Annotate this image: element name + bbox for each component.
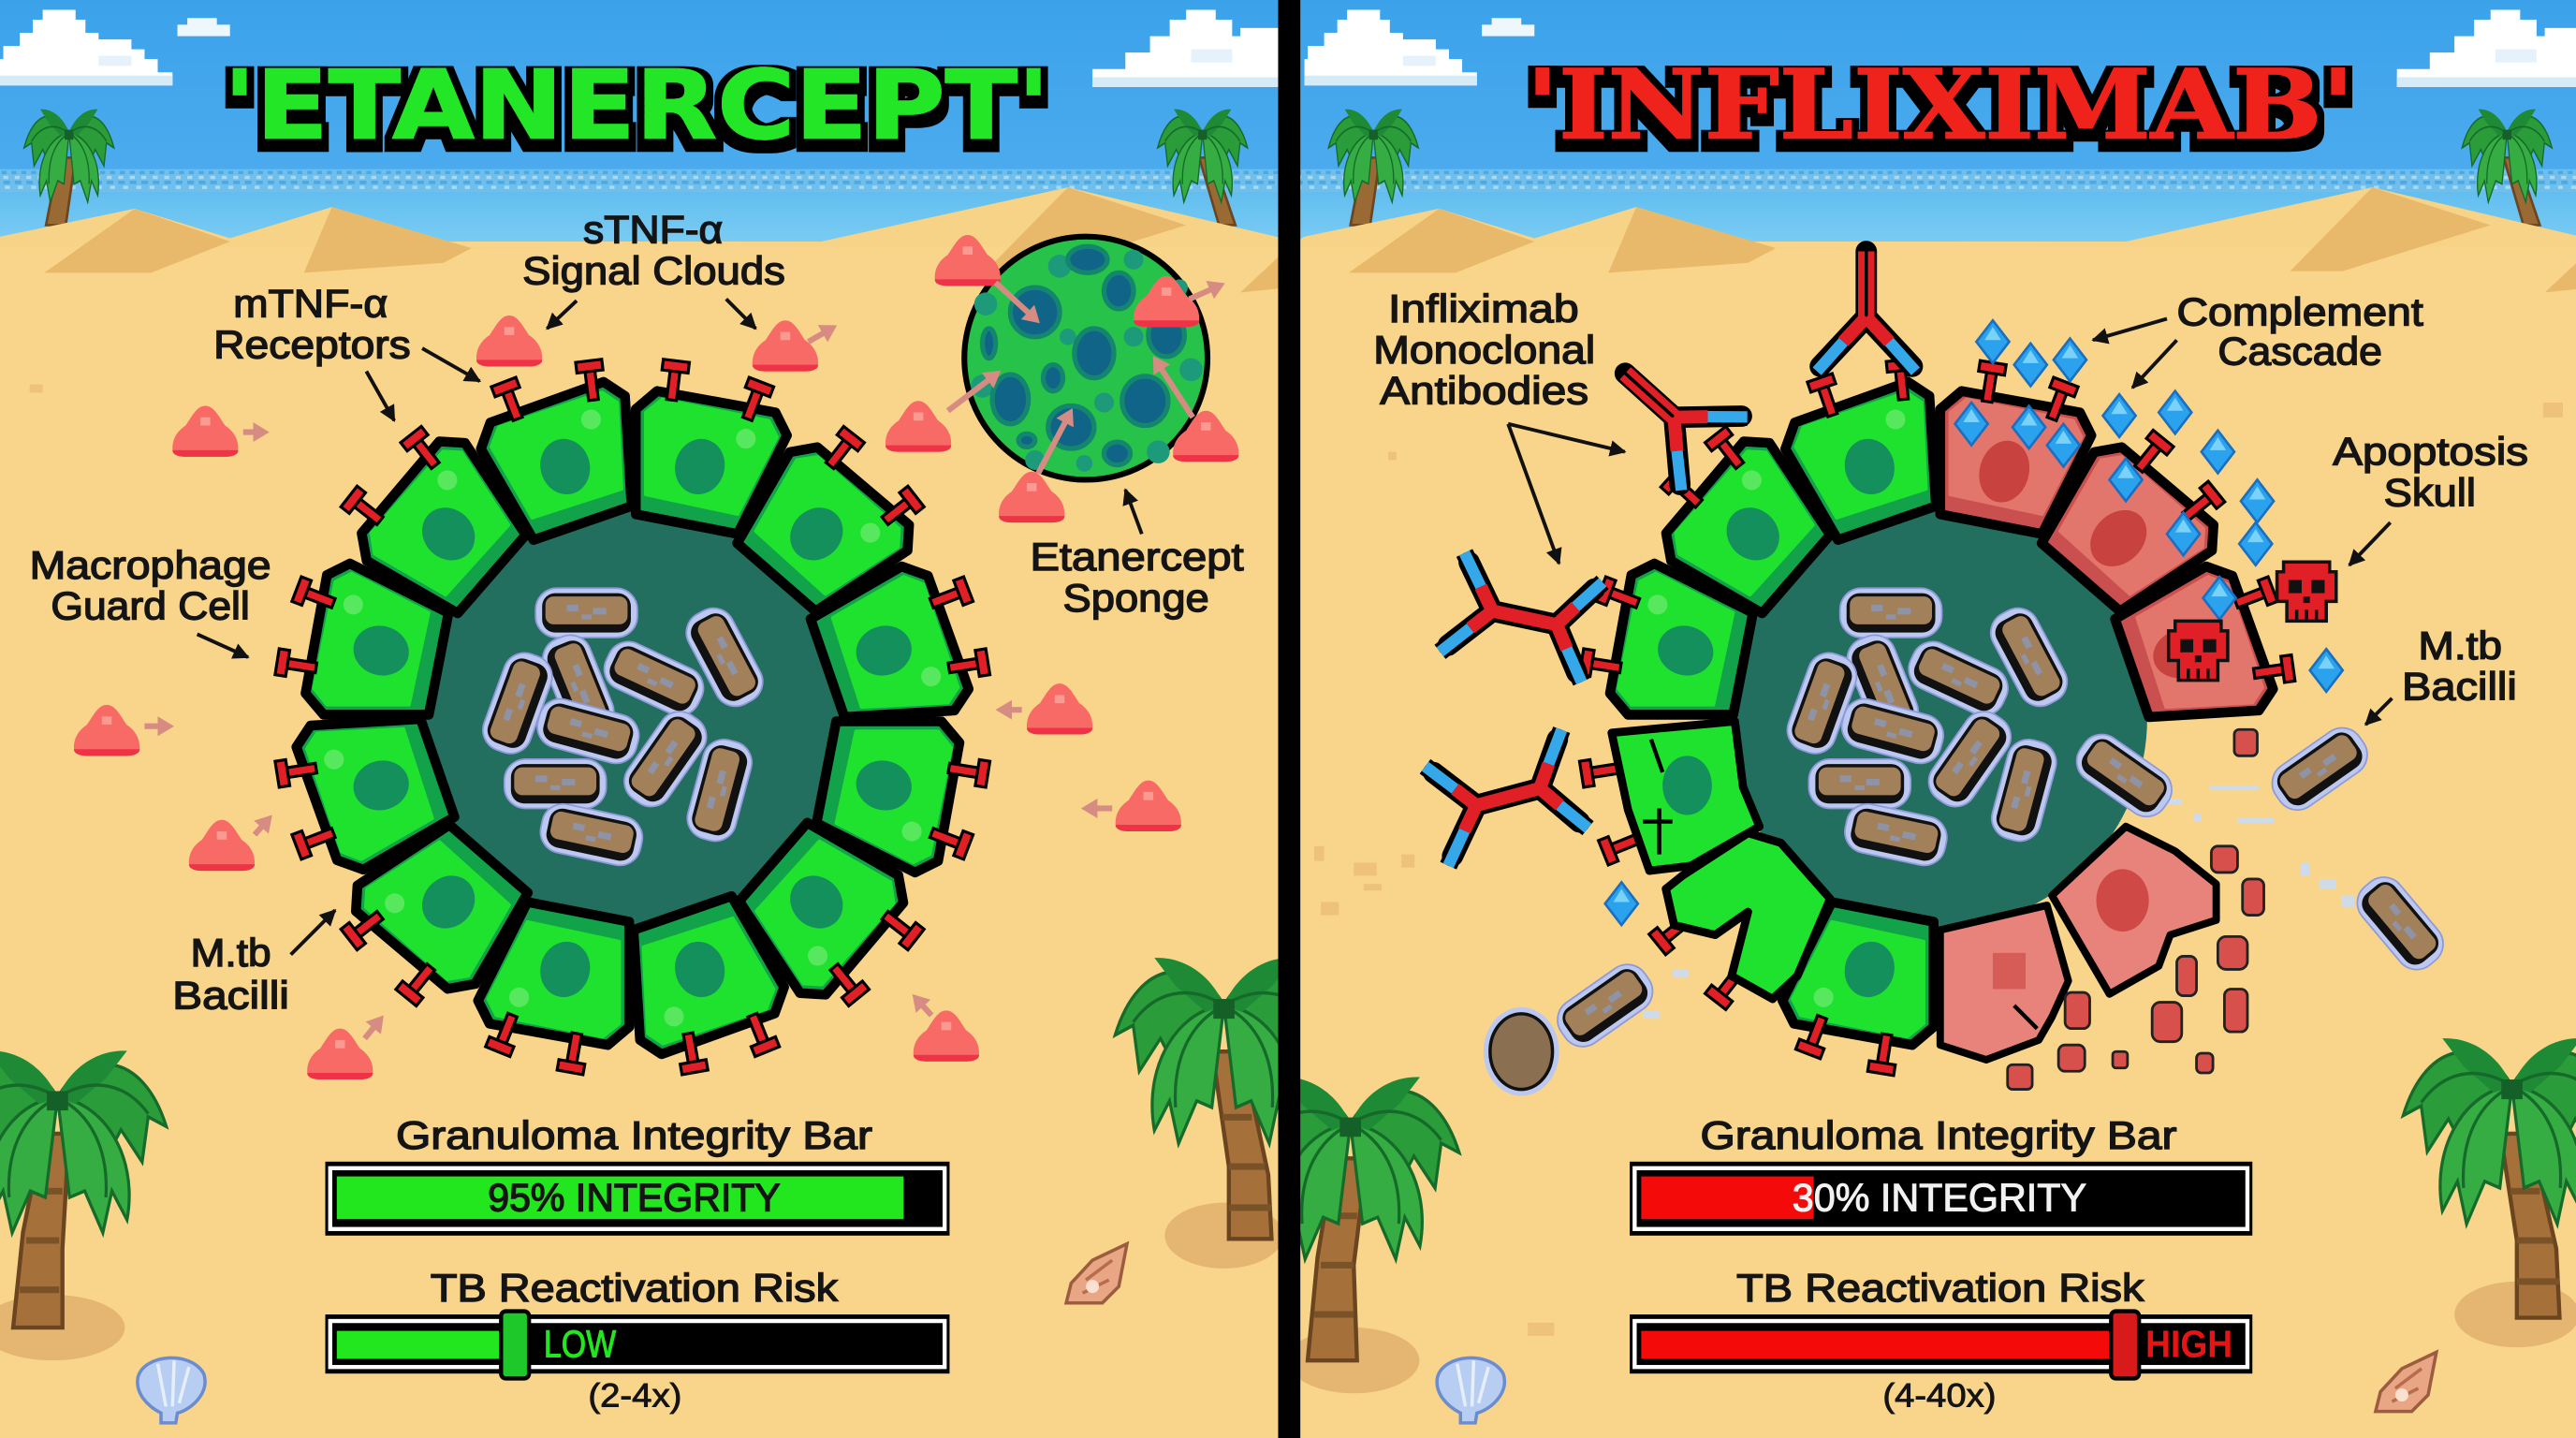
- label: complement cascade: Cascade: [2217, 330, 2382, 374]
- label: mTNF-alpha receptors: [216, 289, 410, 367]
- label: complement cascade: Complement: [2177, 289, 2423, 333]
- gauge: high risk: HIGH: [2145, 1323, 2232, 1366]
- gauge: 95% integrity: [326, 1162, 949, 1236]
- label: complement cascade: [2177, 289, 2423, 374]
- label: Etanercept sponge: [1030, 535, 1244, 620]
- label: mTNF-alpha receptors: Receptors: [213, 323, 411, 367]
- icon: apoptosis skull outside: [2277, 562, 2336, 621]
- label: sTNF-alpha signal clouds: [522, 208, 785, 293]
- arrows: callout leaders: [198, 299, 1142, 955]
- label: M.tb bacilli: [175, 936, 286, 1010]
- palm tree: bottom left: [0, 1050, 167, 1360]
- label: M.tb bacilli: M.tb: [2419, 624, 2502, 668]
- gauge: high risk: [1630, 1312, 2252, 1378]
- icon: blue seashell: [138, 1357, 205, 1423]
- label: macrophage guard cell: [32, 549, 270, 621]
- label: Infliximab monoclonal antibodies: Antibodies: [1380, 369, 1588, 413]
- Infliximab monoclonal antibodies: [1422, 252, 1915, 866]
- label: macrophage guard cell: Guard Cell: [51, 584, 250, 628]
- label: M.tb bacilli: Bacilli: [2402, 665, 2517, 709]
- debris streaks: escaping bacilli trails: [1643, 785, 2354, 1019]
- shattered green cell: [1666, 833, 1830, 999]
- decorative sand patches: [30, 385, 2563, 1336]
- arrows: callout leaders: [1508, 318, 2392, 725]
- icon: Etanercept sponge: [964, 237, 1208, 479]
- label: Etanercept sponge: Sponge: [1063, 576, 1209, 620]
- panel: Etanercept: [0, 51, 1333, 1423]
- label: M.tb bacilli: Bacilli: [172, 974, 289, 1018]
- label: TB reactivation risk heading: TB Reactivation Risk: [1736, 1266, 2144, 1310]
- granuloma: intact ring of macrophages: [272, 358, 993, 1078]
- icon: blue seashell: [1437, 1357, 1504, 1423]
- label: macrophage guard cell: Macrophage: [30, 543, 271, 587]
- icon: apoptosis skull in cell: [2169, 621, 2228, 681]
- gauge: 30% integrity: 30% INTEGRITY: [1793, 1175, 2086, 1219]
- label: apoptosis skull: Skull: [2384, 471, 2476, 515]
- label: Etanercept sponge: Etanercept: [1030, 535, 1244, 579]
- label: risk range 2-4x: (2-4x): [588, 1377, 681, 1414]
- title: Infliximab: 'INFLIXIMAB': [1526, 49, 2354, 161]
- label: apoptosis skull: [2333, 430, 2528, 515]
- complement cascade diamonds: [1605, 320, 2343, 925]
- label: M.tb bacilli: M.tb: [191, 931, 271, 975]
- M.tb bacilli: contained and escaping: [1484, 588, 2452, 1096]
- gauge: low risk: LOW: [544, 1323, 616, 1366]
- label: sTNF-alpha signal clouds: sTNF-α: [583, 208, 723, 252]
- label: sTNF-alpha signal clouds: Signal Clouds: [522, 249, 785, 293]
- label: granuloma integrity bar heading: Granuloma Integrity Bar: [1701, 1113, 2177, 1157]
- panel: Infliximab: [1241, 49, 2576, 1423]
- label: Infliximab monoclonal antibodies: [1373, 286, 1595, 413]
- label: M.tb bacilli: [2402, 624, 2517, 709]
- palm tree: bottom left: [1300, 1077, 1462, 1393]
- shattered red cell lower: [1940, 905, 2069, 1060]
- sTNF-alpha signal clouds: [74, 235, 1238, 1079]
- icon: pink conch shell: [1066, 1244, 1127, 1303]
- panel: Etanercept beach background: [0, 0, 1290, 1438]
- shattered red cell upper: [2052, 827, 2217, 994]
- label: risk range 4-40x: (4-40x): [1882, 1377, 1996, 1414]
- contained M.tb bacilli: [477, 588, 770, 870]
- icon: pink conch shell: [2376, 1352, 2437, 1412]
- panel divider: [1278, 0, 1300, 1438]
- title: Etanercept: 'ETANERCEPT': [224, 51, 1050, 161]
- label: apoptosis skull: Apoptosis: [2333, 430, 2528, 474]
- label: granuloma integrity bar heading: Granuloma Integrity Bar: [396, 1113, 872, 1157]
- gauge: 95% integrity: 95% INTEGRITY: [488, 1175, 781, 1219]
- cracked green cell: [1612, 721, 1760, 871]
- gauge: 30% integrity: [1630, 1162, 2252, 1236]
- label: Infliximab monoclonal antibodies: Infliximab: [1388, 286, 1579, 330]
- palm tree: bottom right: [2403, 1038, 2576, 1347]
- panel: Infliximab beach background: [1296, 0, 2576, 1438]
- palm tree: bottom right: [1112, 958, 1279, 1269]
- label: TB reactivation risk heading: TB Reactivation Risk: [431, 1266, 839, 1310]
- label: Infliximab monoclonal antibodies: Monoclonal: [1373, 328, 1595, 372]
- label: mTNF-alpha receptors: mTNF-α: [233, 282, 388, 326]
- gauge: low risk: [326, 1312, 949, 1378]
- fragments: red cell debris: [2008, 729, 2264, 1090]
- granuloma: damaged ring of macrophages: [1579, 358, 2297, 1076]
